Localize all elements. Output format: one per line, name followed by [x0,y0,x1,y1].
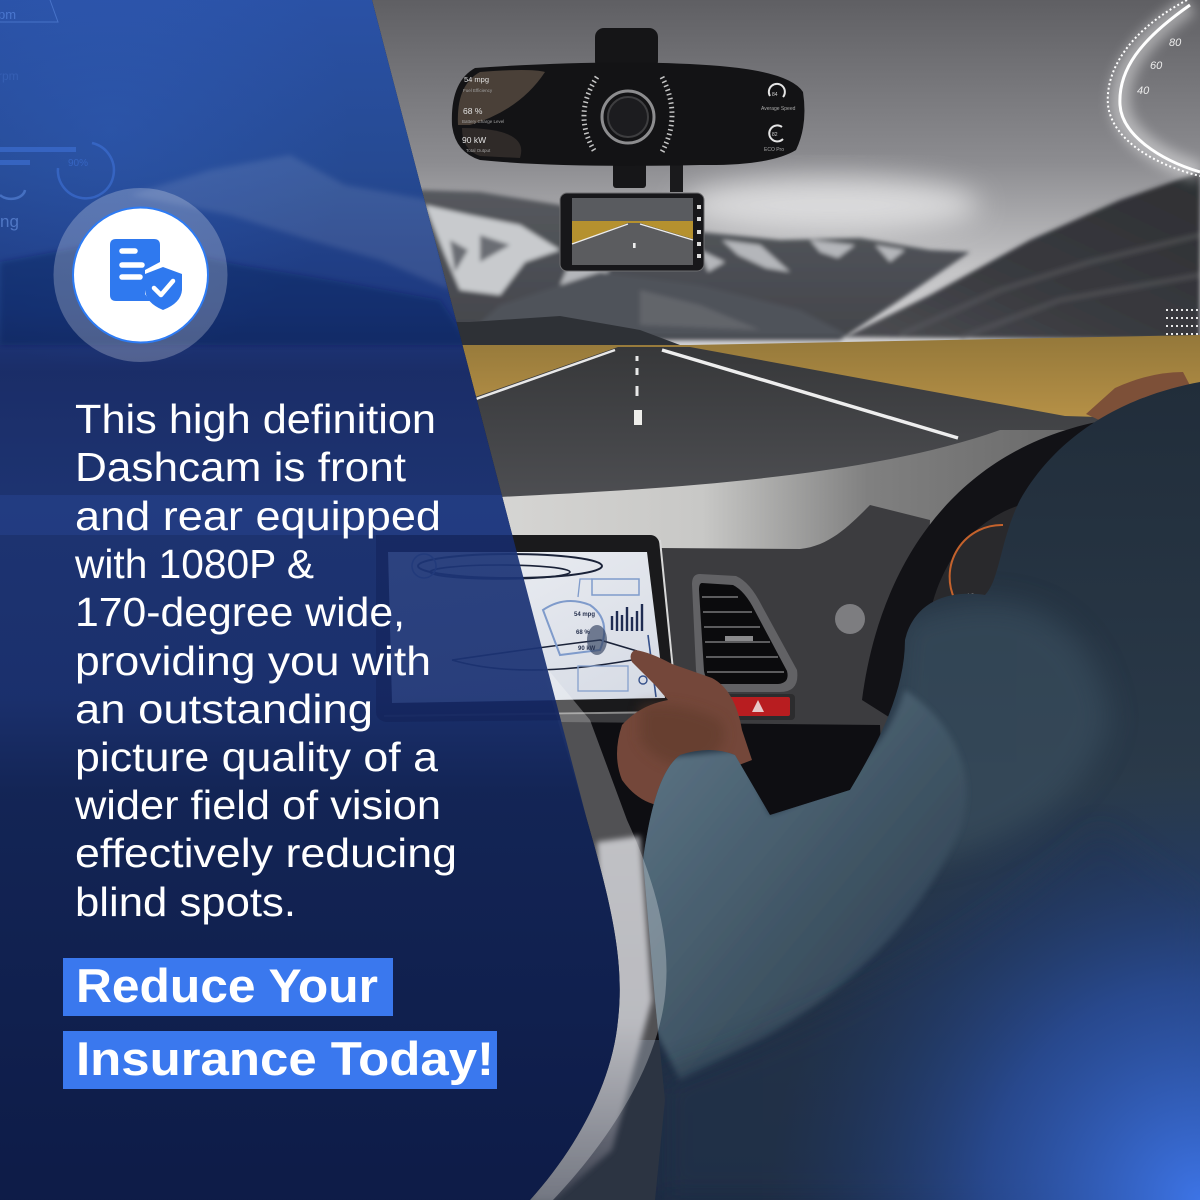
tablet with dashboard UI: 54 mpg [574,612,595,618]
center air vent [692,574,797,692]
panel details [0,0,590,722]
dotted HUD accent [1166,310,1200,334]
rear view mirror: Battery Charge Level [462,119,504,124]
body text: an outstanding [75,686,373,732]
panel underpaint [0,0,620,1200]
dashcam with road view on screen [560,193,704,271]
rear view mirror: 54 mpg [464,75,489,84]
panel top glow [0,40,231,254]
call to action [63,958,497,1089]
body text: Dashcam is front [75,444,407,490]
hazard button [723,694,795,720]
body text: blind spots. [75,879,296,925]
dashboard top [370,430,1200,1200]
curved band highlight [530,660,667,1200]
lower right blue glow [700,760,1200,1200]
jacket body [640,380,1200,1200]
body text [74,396,457,925]
rear view mirror: 84 [772,92,778,98]
body text: effectively reducing [75,830,457,876]
golden fields [370,335,1200,445]
body text: 170-degree wide, [75,589,405,635]
steering wheel and instrument cluster [835,418,1120,740]
speedometer HUD arc: 60 [1150,60,1163,72]
dashboard console [370,505,930,1200]
rear view mirror: 68 % [463,106,483,116]
driver in dark jacket [640,380,1200,1200]
highlighted line two: Insurance Today! [76,1032,494,1085]
rear view mirror: Average Speed [761,106,796,112]
body text: providing you with [75,638,431,684]
speedometer HUD arc: 80 [1169,37,1182,49]
shoulder shading [894,602,1106,854]
blue left panel [0,0,620,1200]
road and shoulder [460,347,1200,520]
lower console [500,722,900,1200]
speedometer HUD arc [1108,0,1200,176]
highlighted line one: Reduce Your [76,959,378,1012]
mountain range with snow [370,190,970,340]
lower jacket shadow [677,1034,762,1078]
steering wheel and instrument cluster: 40 [965,592,975,602]
right dark mountain [845,172,1200,340]
jacket sleeve [640,690,966,1080]
body text: with 1080P & [74,541,314,587]
sky [0,0,1200,360]
ghosted tablet frame [376,535,561,722]
body text: and rear equipped [75,493,441,539]
faded HUD remnants [0,0,114,231]
icon: insurance document with shield [54,188,228,362]
clouds behind mountains [680,177,980,233]
body text: This high definition [75,396,436,442]
gap behind seat [520,1040,680,1200]
speedometer HUD arc: 40 [1137,85,1150,97]
tablet with dashboard UI: 68 % [576,630,590,636]
faded HUD remnants: 90% [68,158,88,169]
faded HUD remnants: ng [0,212,19,231]
rear view mirror: Total Output [466,148,491,153]
rear view mirror: 90 kW [462,135,486,145]
background photo: road scene through windscreen [372,0,1200,1200]
rear view mirror: Fuel Efficiency [463,88,493,93]
tablet with dashboard UI [375,535,676,722]
rear view mirror: 82 [772,132,778,138]
far dark hills [370,316,680,345]
translucent light strip [0,495,520,535]
rear view mirror: ECO Pro [764,147,784,153]
body text: wider field of vision [74,782,441,828]
body text: picture quality of a [75,734,438,780]
ghosted snowy mountains [0,155,470,345]
tablet with dashboard UI: 90 kW [578,646,596,652]
rear view mirror [452,28,804,192]
driver's pointing hand [617,650,752,806]
pale seat [530,836,652,1200]
driver's hand on steering wheel [1086,372,1195,425]
